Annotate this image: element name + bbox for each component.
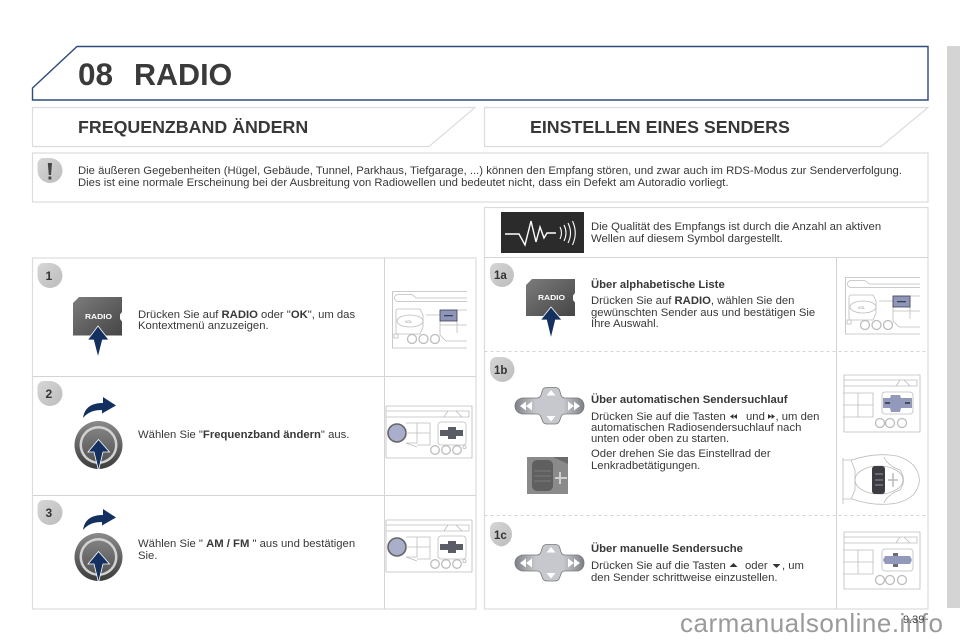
icon: warning xyxy=(37,158,62,183)
icon: up glyph xyxy=(730,563,738,567)
badge: step 2 xyxy=(37,381,62,406)
icon: steering wheel roller xyxy=(527,457,568,494)
section header: station tuning: EINSTELLEN EINES SENDERS xyxy=(530,117,790,137)
badge: 1b xyxy=(490,357,514,382)
badge: step 2: 2 xyxy=(46,387,52,401)
diagram: radio panel, radio key highlighted: VOL xyxy=(858,306,865,310)
text: alphabetical list: gewünschten Sender aus und bestätigen Sie xyxy=(591,307,815,319)
icon: radio button with arrow xyxy=(73,297,122,358)
icon: seek cross control xyxy=(515,544,584,581)
text: step 3: Wählen Sie " AM / FM " aus und bestätigen xyxy=(138,538,355,550)
text: automatic search: unten oder oben zu starten. xyxy=(591,433,729,445)
badge: step 3 xyxy=(37,500,62,525)
icon: radio button with arrow: RADIO xyxy=(538,293,565,302)
watermark: carmanualsonline.info xyxy=(680,608,943,638)
icon: rotary knob with arrows xyxy=(74,509,122,582)
icon: down glyph xyxy=(772,564,780,568)
text: automatic search: Über automatischen Sendersuchlauf xyxy=(591,393,788,406)
section header: station tuning xyxy=(484,108,928,146)
text: step 1: Drücken Sie auf RADIO oder "OK", um das xyxy=(138,309,355,321)
chapter header xyxy=(32,46,928,100)
badge: 1c xyxy=(490,522,512,546)
diagram: steering wheel control xyxy=(843,455,920,504)
warning panel xyxy=(32,153,928,202)
diagram: radio panel, radio key highlighted xyxy=(846,278,920,334)
text: step 3 xyxy=(138,538,355,562)
text: alphabetical list xyxy=(591,278,815,330)
text: step 1: Kontextmenü anzuzeigen. xyxy=(138,320,269,332)
text: step 3: Sie. xyxy=(138,550,157,562)
text: alphabetical list: Über alphabetische Liste xyxy=(591,278,725,291)
section header: frequency band xyxy=(32,108,475,146)
page number: 9.39 xyxy=(903,614,924,626)
badge: step 1: 1 xyxy=(46,269,52,283)
text: manual search xyxy=(591,542,804,584)
diagram: radio panel, horizontal keys highlighted xyxy=(843,532,920,589)
text: automatic search: Drücken Sie auf die Tasten xyxy=(591,411,726,423)
section header: frequency band: FREQUENZBAND ÄNDERN xyxy=(78,117,308,137)
diagram: radio panel, knob highlighted xyxy=(386,406,472,458)
badge: 1a: 1a xyxy=(494,270,507,282)
badge: 1c: 1c xyxy=(494,530,507,542)
text: manual search: den Sender schrittweise einzustellen. xyxy=(591,572,778,584)
side tab xyxy=(947,46,960,608)
icon: rotary knob with arrows xyxy=(74,397,122,470)
diagram: radio panel, radio key highlighted xyxy=(392,292,467,348)
badge: step 3: 3 xyxy=(46,506,52,520)
panel: frequency steps xyxy=(32,258,476,609)
badge: 1a xyxy=(490,263,514,287)
text: automatic search: und xyxy=(746,411,765,423)
text: automatic search: Oder drehen Sie das Einstellrad der xyxy=(591,448,771,460)
chapter number: 08 xyxy=(78,56,113,92)
text: manual search: Über manuelle Sendersuche xyxy=(591,542,743,555)
chapter title: RADIO xyxy=(134,58,232,92)
text: manual search: Drücken Sie auf die Tasten xyxy=(591,560,726,572)
text: automatic search xyxy=(591,393,819,472)
text: automatic search: Lenkradbetätigungen. xyxy=(591,460,700,472)
warning panel: Die äußeren Gegebenheiten (Hügel, Gebäude, Tunnel, Parkhaus, Tiefgarage, ...) können den Empfang stören, und zwar auch im RDS-Modus zur Senderverfolgung. xyxy=(78,165,902,177)
text: automatic search: , um den xyxy=(776,411,819,423)
icon: seek cross control xyxy=(515,388,584,424)
text: step 2: Wählen Sie "Frequenzband ändern" aus. xyxy=(138,429,349,441)
text: alphabetical list: Drücken Sie auf RADIO, wählen Sie den xyxy=(591,295,794,307)
icon: radio button with arrow xyxy=(526,279,575,338)
text: manual search: oder xyxy=(745,560,768,572)
diagram: radio panel, radio key highlighted: VOL xyxy=(405,320,412,324)
badge: step 1 xyxy=(37,263,62,288)
text: step 1 xyxy=(138,309,355,332)
text: automatic search: automatischen Radiosendersuchlauf nach xyxy=(591,422,801,434)
text: reception quality xyxy=(591,221,881,245)
badge: 1b: 1b xyxy=(494,365,507,377)
diagram: radio panel, knob highlighted xyxy=(386,520,472,572)
icon: reception quality symbol xyxy=(501,212,584,253)
text: reception quality: Wellen auf diesem Symbol dargestellt. xyxy=(591,233,783,245)
text: manual search: , um xyxy=(782,560,804,572)
diagram: radio panel, seek cross highlighted xyxy=(843,375,920,432)
text: reception quality: Die Qualität des Empfangs ist durch die Anzahl an aktiven xyxy=(591,221,881,233)
warning panel: Dies ist eine normale Erscheinung bei der Ausbreitung von Radiowellen und bedeutet nicht, dass ein Defekt am Autoradio vorliegt. xyxy=(78,177,729,189)
text: alphabetical list: Ihre Auswahl. xyxy=(591,318,659,330)
panel: station tuning xyxy=(484,208,928,609)
icon: radio button with arrow: RADIO xyxy=(85,312,112,321)
icon: rewind glyph xyxy=(730,414,737,419)
icon: forward glyph xyxy=(768,414,775,419)
